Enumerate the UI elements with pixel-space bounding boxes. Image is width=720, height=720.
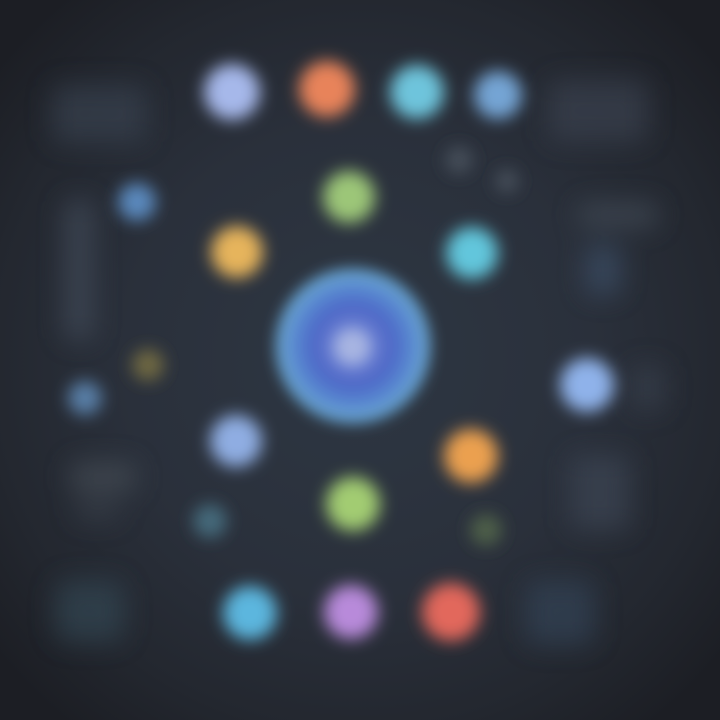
node: dim blue left: [68, 381, 102, 415]
node: periwinkle top: [204, 64, 260, 120]
node: blue lower left: [210, 415, 262, 467]
node: orange lower right: [444, 429, 498, 483]
node: dim teal lower left: [193, 504, 227, 538]
node: green lower: [326, 477, 380, 531]
node: cyan upper right: [446, 227, 498, 279]
node: dim green lower right: [470, 514, 502, 546]
panel: faint blurred side blocks: [52, 80, 665, 645]
node: light blue right: [560, 358, 614, 412]
node: blue left: [118, 183, 156, 221]
node: cyan top: [390, 65, 444, 119]
node: yellow upper left: [211, 226, 263, 278]
node: blue top: [474, 71, 522, 119]
node: faint grey upper right: [445, 146, 473, 174]
node: orange top: [299, 61, 355, 117]
node: faint grey right of centre: [495, 169, 519, 193]
node: green upper: [323, 171, 375, 223]
node: purple bottom: [324, 585, 378, 639]
node: red bottom: [422, 583, 480, 641]
node: sky blue bottom: [223, 586, 277, 640]
central hub circle: [275, 268, 431, 424]
node: dim olive left: [132, 349, 164, 381]
